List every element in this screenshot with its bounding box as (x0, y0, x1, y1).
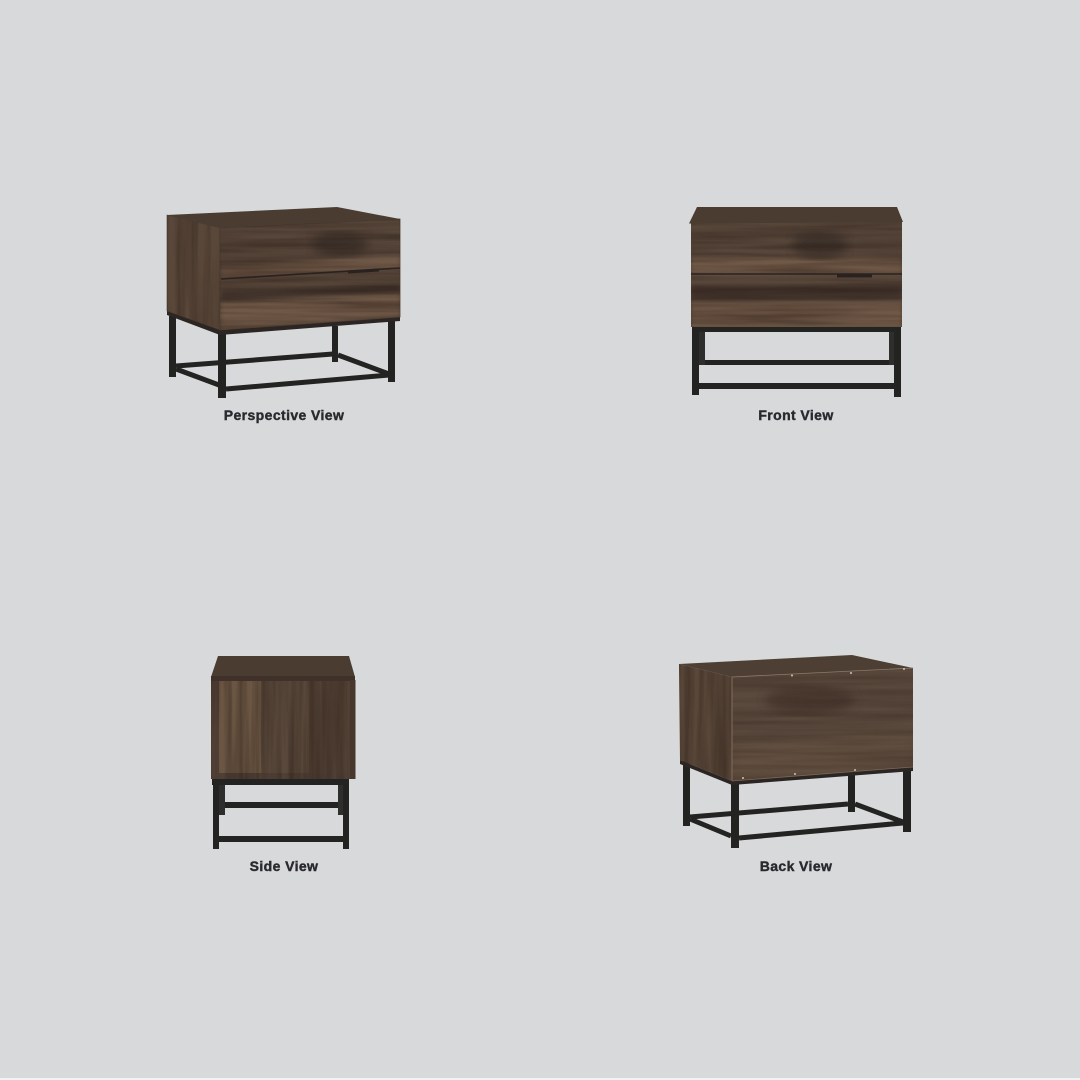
cabinet top (689, 207, 903, 224)
side panel (211, 681, 350, 779)
metal base frame (167, 310, 400, 398)
view: perspective (167, 207, 400, 398)
drawer gap and handle (221, 268, 400, 279)
drawer gap and handle (691, 273, 902, 275)
bottom edge strip (0, 1078, 1080, 1080)
label: side view: Side View (250, 858, 318, 874)
cabinet side panel (679, 664, 732, 782)
drawer fronts sliver (350, 680, 356, 779)
view: back (679, 655, 913, 848)
back panel (732, 668, 913, 781)
cabinet top (211, 656, 355, 677)
drawers (220, 219, 400, 330)
view: front (689, 207, 903, 397)
label: front view: Front View (758, 407, 834, 423)
label: perspective view: Perspective View (224, 407, 344, 423)
label: back view: Back View (760, 858, 832, 874)
back panel edge and screws (732, 668, 913, 781)
metal base frame (212, 779, 349, 849)
cabinet top (167, 207, 400, 228)
cabinet top (679, 655, 913, 677)
metal base frame (692, 327, 901, 397)
metal base frame (680, 760, 913, 848)
drawers (691, 221, 902, 327)
front edge band (211, 676, 355, 682)
cabinet side panel (167, 215, 220, 331)
view: side (211, 656, 356, 849)
